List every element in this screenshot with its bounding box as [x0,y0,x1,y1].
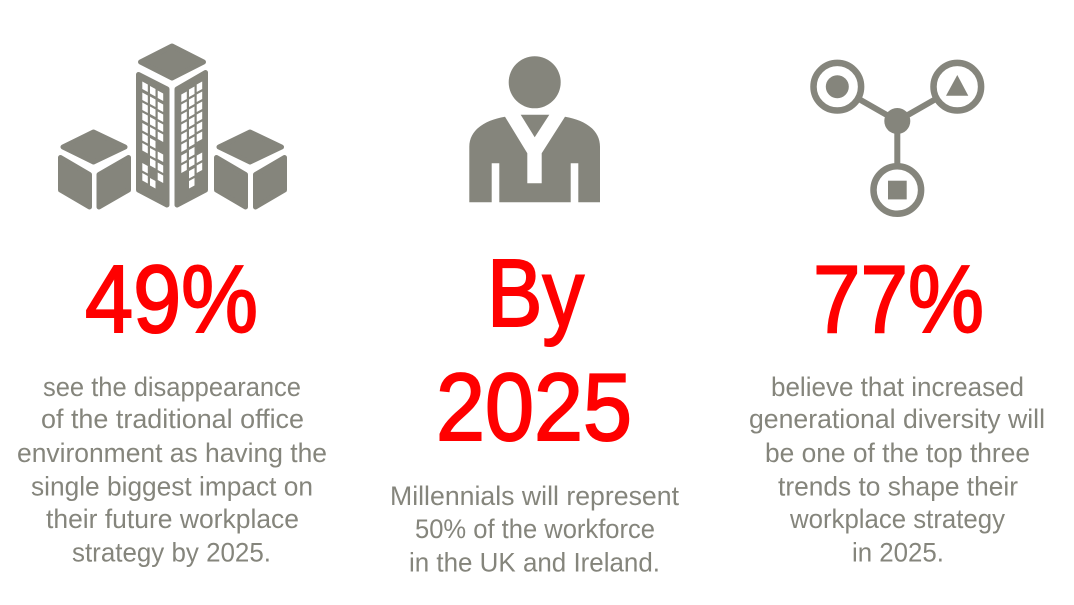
text block: middle description: 50% of the workforce [415,514,655,544]
text block: right description: believe that increased [771,372,1024,402]
text block: right description: be one of the top three [765,438,1030,468]
text block: middle description [390,481,679,578]
text block: left description: of the traditional office [41,404,304,434]
icon: person in suit [469,56,600,202]
text block: right description: workplace strategy [789,504,1005,534]
stat: 77%: 77% [813,246,984,353]
text block: right description: in 2025. [852,538,944,568]
stat: By 2025: By [487,240,584,347]
stat: By 2025 [436,240,632,461]
icon: connected network [814,63,981,214]
text block: left description: single biggest impact on [31,472,313,502]
text block: left description: their future workplace [46,504,299,534]
stat: By 2025: 2025 [436,354,632,461]
text block: left description: see the disappearance [43,372,301,402]
text block: left description: strategy by 2025. [72,538,271,568]
icon part: left cube [60,132,128,207]
text block: middle description: in the UK and Ireland. [409,548,660,578]
text block: right description: trends to shape their [778,472,1018,502]
stat: 49%: 49% [85,246,258,353]
text block: right description: generational diversity will [749,404,1045,434]
icon part: right cube [216,132,284,207]
text block: left description: environment as having the [17,438,327,468]
text block: left description [17,372,327,568]
icon: office buildings [60,46,284,207]
icon part: tall tower [138,46,206,205]
text block: right description [749,372,1045,568]
text block: middle description: Millennials will represent [390,481,679,511]
